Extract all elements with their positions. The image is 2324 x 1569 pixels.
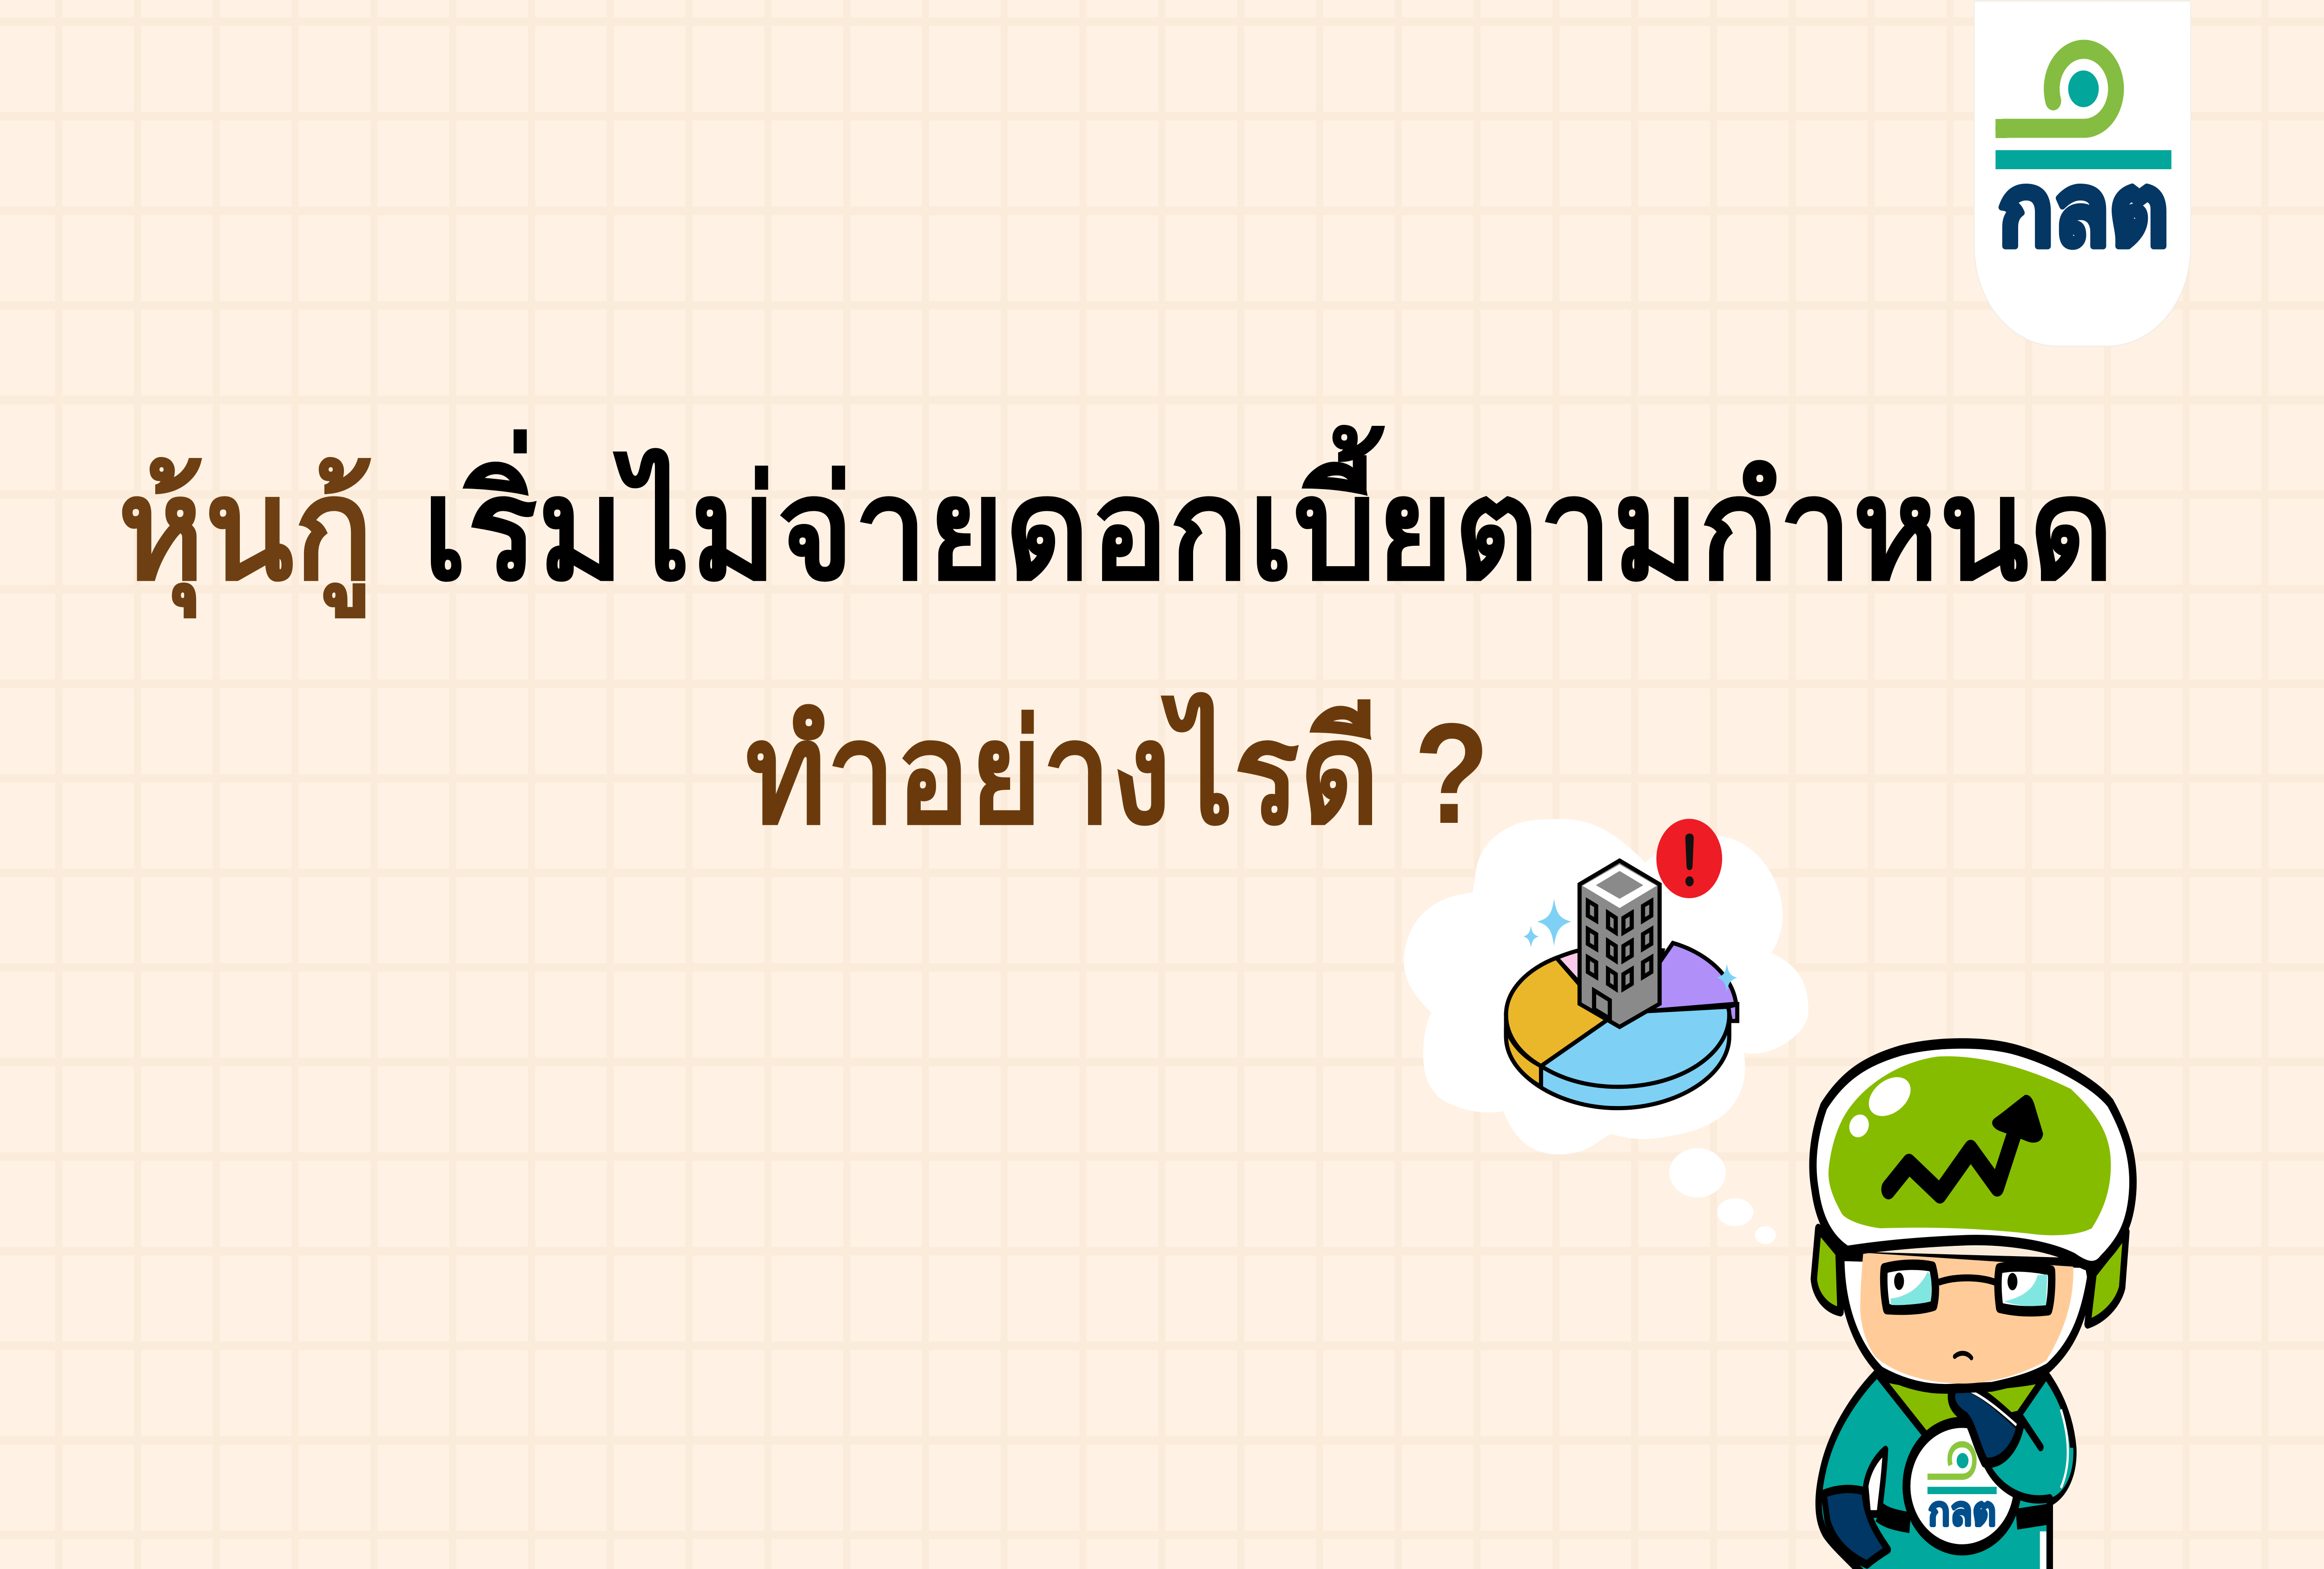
mascot character xyxy=(1813,1043,2133,1569)
logo tab: SEC Thailand xyxy=(1974,1,2191,346)
pie side wall gold xyxy=(1506,1027,1541,1087)
left lens xyxy=(1884,1264,1935,1310)
body xyxy=(1819,1375,2073,1569)
title line 1: brown keyword: หุ้นกู้ xyxy=(118,450,373,619)
helmet trend arrow xyxy=(1888,1095,2043,1193)
glasses bridge xyxy=(1939,1278,1995,1282)
title line 1: black text: เริ่มไม่จ่ายดอกเบี้ยตามกำหนด xyxy=(422,424,2114,609)
pie side wall xyxy=(1506,1015,1729,1108)
trend line xyxy=(1888,1127,2016,1193)
left ear flap xyxy=(1814,1228,1841,1312)
lower body white edge xyxy=(2040,1531,2047,1569)
helmet green xyxy=(1829,1056,2111,1235)
face skin xyxy=(1860,1253,2073,1384)
building door xyxy=(1594,991,1610,1019)
pie chart xyxy=(1506,943,1737,1108)
purple slice xyxy=(1646,943,1736,1011)
logo mark: green swirl xyxy=(2003,49,2116,128)
left lens tint xyxy=(1890,1272,1932,1305)
badge swirl xyxy=(1928,1444,1974,1476)
raised arm outline xyxy=(1987,1418,2050,1499)
exclamation mark xyxy=(1685,834,1694,870)
raised arm xyxy=(1987,1417,2073,1499)
hood and face xyxy=(1841,1253,2091,1389)
arm white edge xyxy=(2061,1410,2068,1488)
right pupil xyxy=(2007,1273,2017,1291)
logo wordmark: กลต xyxy=(1998,154,2169,266)
sparkle small right xyxy=(1717,964,1737,992)
neck collar xyxy=(1879,1377,2044,1436)
logo mark: teal bar xyxy=(1995,150,2172,169)
badge wordmark: กลต xyxy=(1928,1489,1996,1534)
belt xyxy=(1879,1512,2050,1523)
right ear flap xyxy=(2087,1232,2126,1324)
alert circle xyxy=(1657,819,1722,898)
title line 2: ทำอย่างไรดี ? xyxy=(745,691,1489,854)
left sleeve spike xyxy=(1866,1450,1886,1514)
sparkle large xyxy=(1537,899,1571,946)
helmet highlight small xyxy=(1848,1112,1871,1140)
badge dot xyxy=(1957,1453,1968,1468)
glove highlight xyxy=(1958,1388,2016,1425)
cloud xyxy=(1404,819,1809,1154)
thought dot medium xyxy=(1717,1198,1753,1226)
right lens xyxy=(1998,1266,2052,1311)
helmet highlight large xyxy=(1865,1070,1915,1124)
left hand glove xyxy=(1824,1489,1888,1564)
hood xyxy=(1841,1256,2091,1389)
building roof inset xyxy=(1596,871,1643,899)
building roof xyxy=(1583,864,1657,908)
left pupil xyxy=(1894,1272,1904,1290)
helmet shell xyxy=(1813,1043,2133,1266)
thought dot large xyxy=(1670,1148,1726,1198)
logo mark: left end square cap xyxy=(1995,119,2007,138)
thought bubble with pie chart and building xyxy=(1404,819,1809,1244)
logo panel xyxy=(1974,1,2191,346)
pie extruded purple edge xyxy=(1728,1004,1737,1021)
chest badge xyxy=(1907,1423,2018,1550)
badge bar xyxy=(1928,1487,1997,1494)
mouth xyxy=(1954,1353,1972,1358)
arrow head xyxy=(1992,1095,2043,1143)
building xyxy=(1579,861,1660,1027)
right hand glove xyxy=(1951,1385,2020,1463)
exclamation dot xyxy=(1685,876,1694,887)
badge disc xyxy=(1907,1423,2018,1550)
building windows xyxy=(1588,901,1651,989)
building body xyxy=(1579,861,1660,1027)
helmet xyxy=(1813,1043,2133,1266)
logo mark: teal dot xyxy=(2068,71,2099,107)
thought dot small xyxy=(1755,1226,1776,1244)
blue slice xyxy=(1541,1007,1729,1087)
sparkle small left xyxy=(1523,926,1539,947)
alert badge xyxy=(1657,819,1722,898)
right lens tint xyxy=(2004,1274,2047,1306)
pink slice xyxy=(1557,950,1663,1019)
gold slice xyxy=(1506,958,1609,1066)
